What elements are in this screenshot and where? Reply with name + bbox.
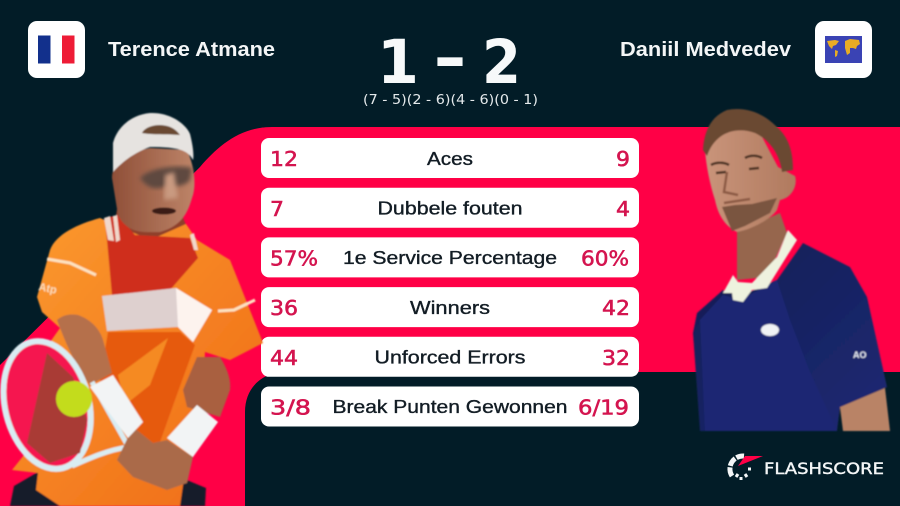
left arm xyxy=(57,315,112,385)
stat row: 1e Service Percentage xyxy=(261,237,639,277)
logo wordmark: FLASHSCORE xyxy=(764,459,884,478)
stat row: Winners: 36 xyxy=(270,296,298,320)
match score xyxy=(377,23,521,98)
home player name: Terence Atmane xyxy=(108,39,275,61)
stat row: Aces: 9 xyxy=(616,147,630,171)
nose xyxy=(164,172,178,200)
stat row: Dubbele fouten xyxy=(261,188,639,228)
stat row: Break Punten Gewonnen: 6/19 xyxy=(578,396,629,420)
neck xyxy=(737,213,787,280)
stat row: 1e Service Percentage: 60% xyxy=(581,246,629,270)
flag: France xyxy=(28,21,85,78)
eye shadow xyxy=(140,167,192,188)
hat opening xyxy=(142,125,180,135)
racket throat xyxy=(72,382,128,466)
racket strings xyxy=(27,353,87,463)
away player name: Daniil Medvedev xyxy=(620,39,792,61)
player photo: Daniil Medvedev xyxy=(693,109,890,431)
racket xyxy=(0,332,128,478)
right forearm xyxy=(183,357,230,417)
sleeve text: Atp xyxy=(37,281,58,297)
match score: 1 xyxy=(377,27,419,98)
stat row: Dubbele fouten: 4 xyxy=(616,197,630,221)
stat row: Winners: Winners xyxy=(410,298,490,318)
stat row: Break Punten Gewonnen xyxy=(261,386,639,426)
stats table xyxy=(261,138,639,426)
racket head xyxy=(0,332,103,478)
tennis ball xyxy=(56,381,92,417)
hat xyxy=(113,113,193,172)
stat row: Aces: Aces xyxy=(427,149,473,169)
stat row: 1e Service Percentage: 1e Service Percentage xyxy=(343,248,557,268)
stat row: Break Punten Gewonnen: 3/8 xyxy=(270,396,311,420)
stat row: Winners: 42 xyxy=(602,296,630,320)
face xyxy=(112,148,194,232)
orange shirt xyxy=(12,218,263,506)
logo icon xyxy=(730,456,763,480)
player photo: Terence Atmane xyxy=(0,113,263,506)
shirt shadow xyxy=(105,215,198,295)
lower shirt highlight xyxy=(118,338,168,405)
stat row: Dubbele fouten: Dubbele fouten xyxy=(378,198,522,218)
shorts xyxy=(10,472,206,506)
shirt white band xyxy=(102,288,212,342)
sleeve stripes xyxy=(47,259,96,275)
shirt front xyxy=(700,280,837,431)
stat row: Aces: 12 xyxy=(270,147,298,171)
right wristband xyxy=(167,405,218,457)
match score: - xyxy=(433,23,467,94)
stat row: Unforced Errors xyxy=(261,337,639,377)
right arm xyxy=(840,388,890,431)
pink background shape xyxy=(0,127,900,506)
shirt lower shadow xyxy=(100,332,195,470)
mouth xyxy=(152,208,176,214)
stat row: Aces xyxy=(261,138,639,178)
crocodile logo xyxy=(761,324,779,336)
nose and mouth xyxy=(724,172,750,203)
hair xyxy=(703,109,793,172)
hands xyxy=(117,427,193,490)
stat row: Unforced Errors: 32 xyxy=(602,346,630,370)
stat row: Break Punten Gewonnen: Break Punten Gewonnen xyxy=(332,397,568,417)
stat row: 1e Service Percentage: 57% xyxy=(270,246,318,270)
neck xyxy=(115,190,190,250)
eyebrows and eyes xyxy=(711,156,762,173)
stat row: Unforced Errors: Unforced Errors xyxy=(374,348,526,368)
stat row: Dubbele fouten: 7 xyxy=(270,197,284,221)
face xyxy=(705,129,796,232)
set scores: (7 - 5)(2 - 6)(4 - 6)(0 - 1) xyxy=(363,93,538,108)
white band highlight xyxy=(176,288,212,342)
flag: world xyxy=(815,21,872,78)
collar stripes xyxy=(104,215,198,250)
sleeve logo: AO xyxy=(853,350,866,360)
stat row: Winners xyxy=(261,287,639,327)
match score: 2 xyxy=(482,27,521,98)
stat row: Unforced Errors: 44 xyxy=(270,346,298,370)
beard xyxy=(722,198,777,231)
collar xyxy=(723,230,797,302)
navy shirt xyxy=(693,243,887,431)
left wristband xyxy=(90,375,143,438)
Flashscore logo xyxy=(730,456,884,480)
